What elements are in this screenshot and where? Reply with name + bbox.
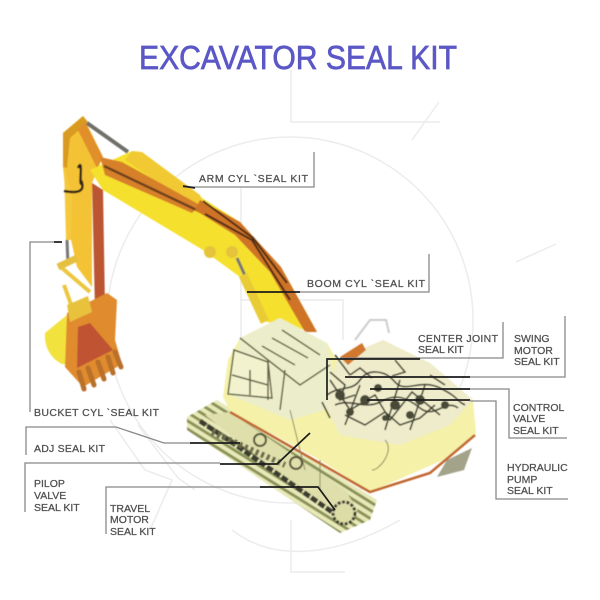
label: swing motor: SWING xyxy=(514,333,550,345)
label: pilot valve: PILOP xyxy=(34,478,65,490)
label: pilot valve: SEAL KIT xyxy=(34,502,80,514)
label: adj: ADJ SEAL KIT xyxy=(34,443,106,455)
label: hydraulic pump: PUMP xyxy=(507,474,537,486)
label: pilot valve: VALVE xyxy=(34,490,66,502)
upper body xyxy=(223,318,476,492)
arm xyxy=(58,116,128,310)
label: center joint: CENTER JOINT xyxy=(418,333,499,345)
label: hydraulic pump: HYDRAULIC xyxy=(507,462,568,474)
title: EXCAVATOR SEAL KIT xyxy=(139,39,457,76)
label: swing motor: MOTOR xyxy=(514,345,553,357)
label: pilot valve xyxy=(34,478,80,514)
label: swing motor xyxy=(514,333,560,368)
bucket xyxy=(45,293,122,389)
label: travel motor xyxy=(110,503,156,538)
label: center joint: SEAL KIT xyxy=(418,344,464,356)
label: swing motor: SEAL KIT xyxy=(514,356,560,368)
track xyxy=(187,400,472,533)
label: control valve xyxy=(513,402,564,437)
label: control valve: SEAL KIT xyxy=(513,425,559,437)
label: center joint xyxy=(418,333,499,356)
label: travel motor: MOTOR xyxy=(110,514,149,526)
label: hydraulic pump xyxy=(507,462,568,497)
boom xyxy=(90,151,317,332)
label: control valve: CONTROL xyxy=(513,402,564,414)
engine detail xyxy=(322,320,465,430)
black leader segments xyxy=(54,186,470,510)
leader lines xyxy=(25,152,568,534)
label: hydraulic pump: SEAL KIT xyxy=(507,485,553,497)
label: travel motor: SEAL KIT xyxy=(110,526,156,538)
label: travel motor: TRAVEL xyxy=(110,503,150,515)
label: arm cylinder: ARM CYL `SEAL KIT xyxy=(199,173,309,185)
label: boom cylinder: BOOM CYL `SEAL KIT xyxy=(307,278,426,290)
label: control valve: VALVE xyxy=(513,413,545,425)
excavator illustration xyxy=(45,116,476,533)
label: bucket cylinder: BUCKET CYL `SEAL KIT xyxy=(34,407,160,419)
